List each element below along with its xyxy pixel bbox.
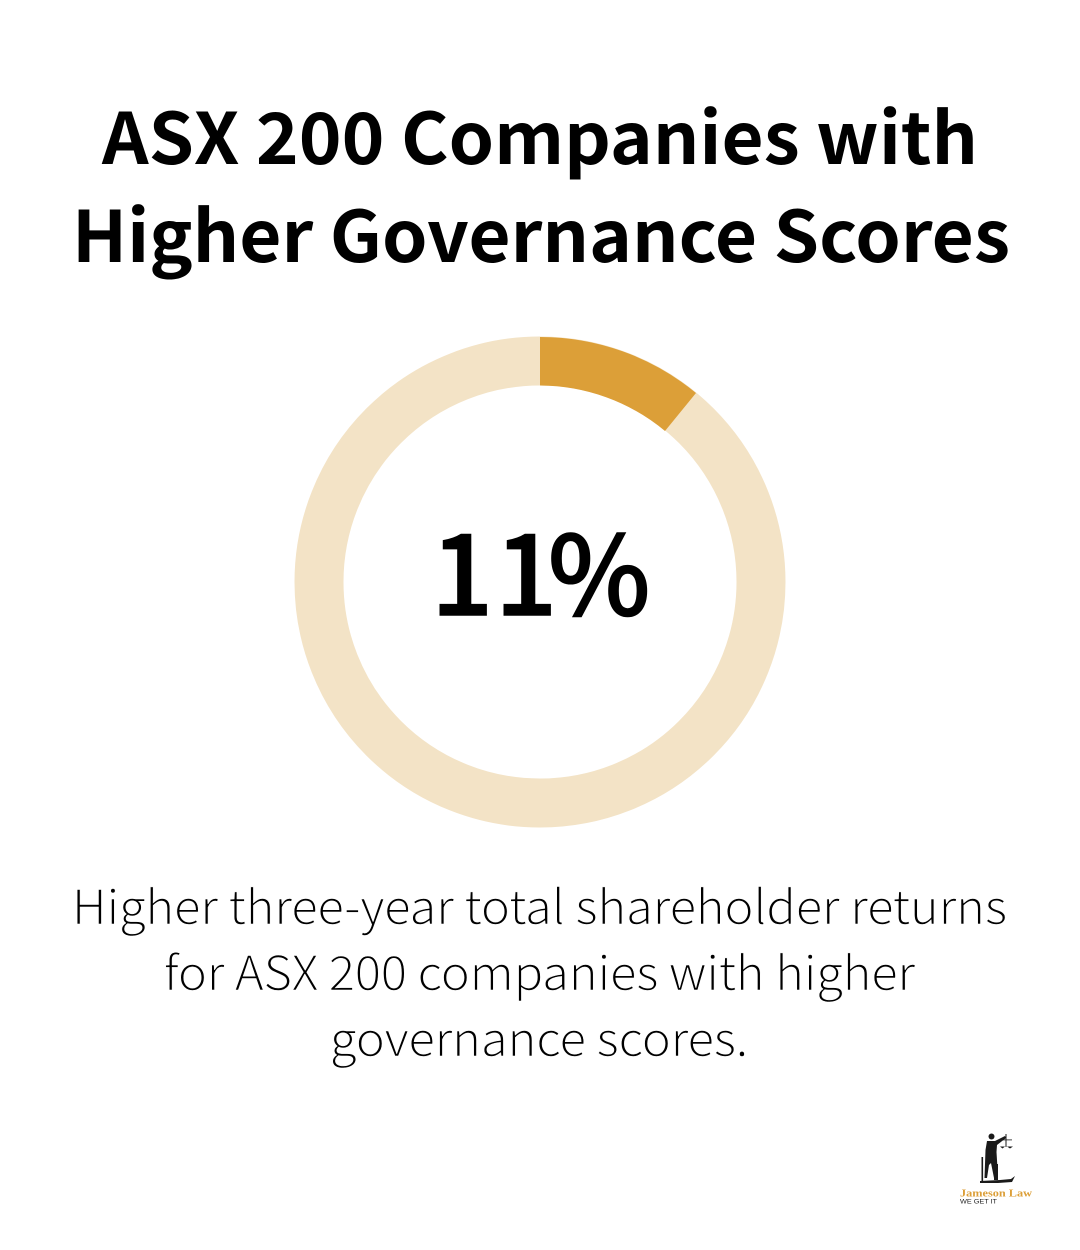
logo tagline: WE GET IT xyxy=(960,1198,997,1206)
description text xyxy=(72,869,1007,1070)
description text: governance scores. xyxy=(330,1001,748,1070)
description text: for ASX 200 companies with higher xyxy=(164,935,915,1004)
donut chart: 11% xyxy=(319,337,761,803)
percentage value: 11% xyxy=(431,490,650,647)
title: Higher Governance Scores xyxy=(72,181,1010,283)
donut highlighted segment xyxy=(540,337,696,431)
logo: Jameson Law xyxy=(960,1134,1032,1206)
icon: lady justice figure xyxy=(980,1134,1015,1183)
donut track xyxy=(319,361,761,803)
title: ASX 200 Companies with xyxy=(101,83,978,185)
title xyxy=(72,83,1010,283)
description text: Higher three-year total shareholder returns xyxy=(72,869,1007,938)
logo name: Jameson Law xyxy=(960,1188,1032,1200)
